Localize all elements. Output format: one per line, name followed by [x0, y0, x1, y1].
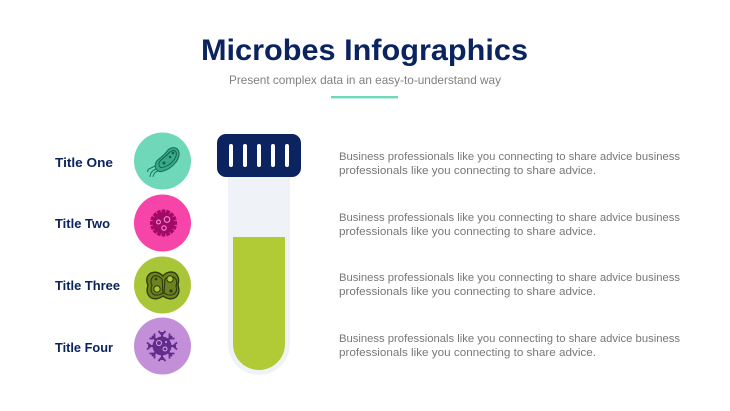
label: Title Three: Title Three [55, 278, 120, 293]
icon: dividing cell on green circle [134, 256, 191, 314]
text block three [339, 272, 680, 298]
green liquid [233, 237, 285, 370]
accent underline [331, 96, 398, 98]
text block one: professionals like you connecting to share advice. [339, 165, 596, 177]
text block two [339, 212, 680, 238]
tube glass [228, 170, 290, 375]
row labels [55, 155, 120, 355]
text block four: Business professionals like you connecting to share advice business [339, 333, 680, 345]
subtitle: Present complex data in an easy-to-understand way [229, 73, 501, 87]
label: Title Two: Title Two [55, 216, 110, 231]
text block two: Business professionals like you connecting to share advice business [339, 212, 680, 224]
icon: virus on purple circle [134, 318, 191, 374]
tube cap [217, 134, 301, 177]
cap ridges [229, 144, 289, 167]
test tube [217, 134, 301, 375]
text block two: professionals like you connecting to share advice. [339, 226, 596, 238]
text block one: Business professionals like you connecting to share advice business [339, 151, 680, 163]
text block one [339, 151, 680, 177]
text block four: professionals like you connecting to share advice. [339, 347, 596, 359]
icon: bacterium on teal circle [134, 132, 191, 190]
text block three: professionals like you connecting to share advice. [339, 286, 596, 298]
title: Microbes Infographics [201, 34, 528, 67]
icon: spiky microbe on pink circle [134, 194, 191, 252]
label: Title One: Title One [55, 155, 113, 170]
text block four [339, 333, 680, 359]
text block three: Business professionals like you connecting to share advice business [339, 272, 680, 284]
label: Title Four: Title Four [55, 340, 113, 355]
